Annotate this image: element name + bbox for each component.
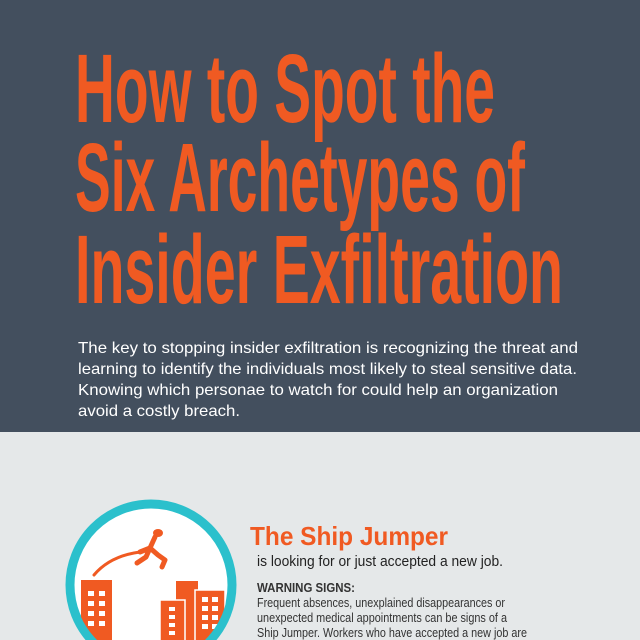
title [75, 34, 563, 324]
warning signs: Frequent absences, unexplained disappearances or [257, 596, 505, 610]
intro paragraph: The key to stopping insider exfiltration is recognizing the threat and [78, 340, 578, 357]
archetype subtitle: is looking for or just accepted a new job. [257, 553, 503, 570]
intro paragraph [78, 340, 578, 420]
intro paragraph: avoid a costly breach. [78, 403, 240, 420]
intro paragraph: Knowing which personae to watch for could help an organization [78, 382, 558, 399]
icon: ship jumper circle [70, 504, 232, 640]
warning signs: WARNING SIGNS: [257, 581, 355, 595]
warning signs: unexpected medical appointments can be signs of a [257, 611, 507, 625]
warning signs [257, 581, 527, 640]
archetype heading: The Ship Jumper [250, 521, 448, 551]
header panel [0, 0, 640, 432]
jumping figure [94, 529, 165, 575]
intro paragraph: learning to identify the individuals most likely to steal sensitive data. [78, 361, 577, 378]
warning signs: Ship Jumper. Workers who have accepted a new job are [257, 626, 527, 640]
